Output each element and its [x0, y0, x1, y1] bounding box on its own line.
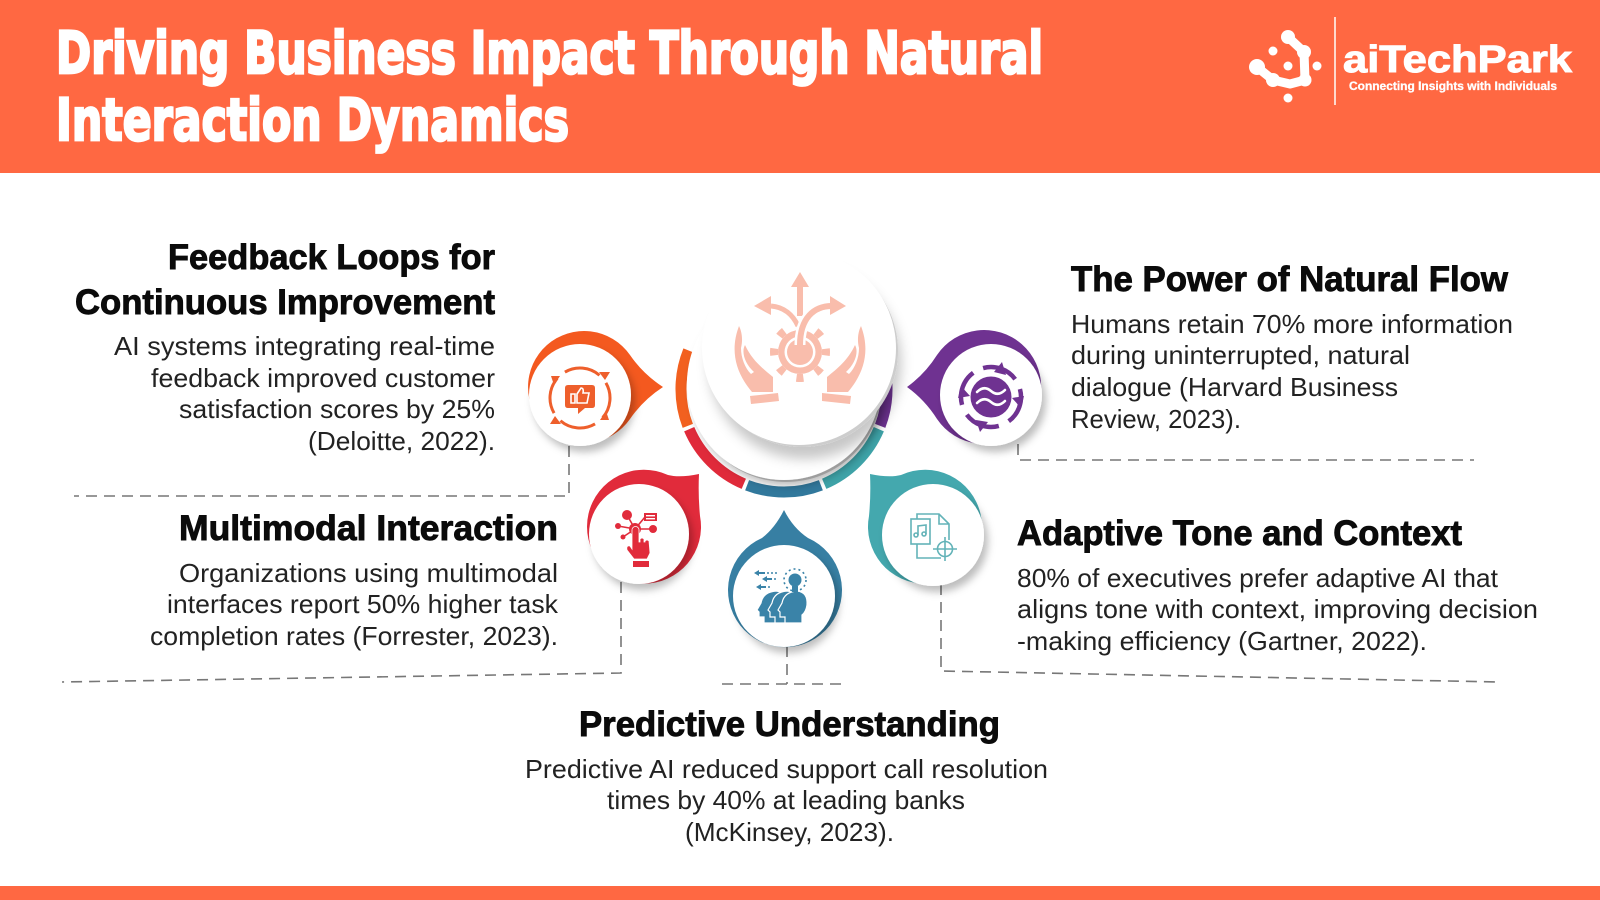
callout: feedback loops icon	[528, 331, 663, 446]
connector: feedback loops	[74, 446, 569, 496]
text block: adaptive tone: 80% of executives prefer adaptive AI that	[1017, 563, 1499, 593]
logo: aiTechPark: aiTechPark	[1343, 39, 1573, 81]
text block: adaptive tone: -making efficiency (Gartner, 2022).	[1017, 626, 1427, 656]
text block: multimodal: interfaces report 50% higher task	[167, 589, 559, 619]
text block: predictive	[525, 704, 1048, 847]
icon: touch hand with nodes	[615, 510, 657, 567]
central hub	[681, 251, 898, 492]
connector: predictive	[722, 646, 846, 684]
text block: adaptive tone: aligns tone with context, improving decision	[1017, 594, 1538, 624]
text block: feedback loops: satisfaction scores by 25%	[179, 394, 495, 424]
text block: multimodal: Organizations using multimodal	[179, 558, 558, 588]
text block: feedback loops: (Deloitte, 2022).	[308, 426, 495, 456]
text block: predictive: times by 40% at leading banks	[607, 785, 965, 815]
text block: predictive: Predictive Understanding	[579, 704, 1000, 744]
icon: waves in cycle	[954, 360, 1028, 434]
text block: natural flow: during uninterrupted, natural	[1071, 340, 1410, 370]
connector: natural flow	[1018, 444, 1474, 460]
text block: predictive: Predictive AI reduced support call resolution	[525, 754, 1048, 784]
icon: gear, arrows and hands	[735, 272, 865, 404]
text block: natural flow: Humans retain 70% more information	[1071, 309, 1513, 339]
text block: natural flow: Review, 2023).	[1071, 404, 1241, 434]
footer band	[0, 886, 1600, 900]
title: Interaction Dynamics	[56, 86, 569, 154]
logo: aiTechPark	[1249, 17, 1573, 105]
header band	[0, 0, 1600, 173]
title: Driving Business Impact Through Natural	[56, 19, 1043, 87]
text block: feedback loops: AI systems integrating real-time	[114, 331, 495, 361]
text block: natural flow: The Power of Natural Flow	[1071, 259, 1508, 299]
text block: multimodal: Multimodal Interaction	[179, 508, 558, 548]
logo mark	[1249, 30, 1322, 102]
text block: feedback loops	[75, 237, 495, 456]
text block: natural flow: dialogue (Harvard Business	[1071, 372, 1398, 402]
text block: multimodal: completion rates (Forrester, 2023).	[150, 621, 558, 651]
text block: predictive: (McKinsey, 2023).	[685, 817, 894, 847]
text block: natural flow	[1071, 259, 1513, 434]
connector: adaptive tone	[941, 584, 1499, 682]
segmented ring	[681, 350, 887, 492]
icon: thumbs up in loop	[539, 357, 621, 439]
text block: feedback loops: Feedback Loops for	[168, 237, 495, 277]
callout: adaptive tone icon	[868, 470, 984, 586]
callout: natural flow icon	[907, 330, 1042, 446]
icon: music file and target	[911, 514, 957, 561]
logo: aiTechPark: Connecting Insights with Individuals	[1349, 81, 1557, 93]
text block: feedback loops: Continuous Improvement	[75, 282, 495, 322]
text block: feedback loops: feedback improved customer	[151, 363, 495, 393]
text block: adaptive tone	[1017, 513, 1538, 656]
callout: predictive icon	[728, 510, 842, 647]
text block: adaptive tone: Adaptive Tone and Context	[1017, 513, 1462, 553]
connector: multimodal	[62, 582, 621, 682]
callout: multimodal icon	[587, 470, 701, 584]
title	[56, 19, 1043, 154]
text block: multimodal	[150, 508, 559, 651]
icon: heads with bulb	[754, 569, 807, 623]
